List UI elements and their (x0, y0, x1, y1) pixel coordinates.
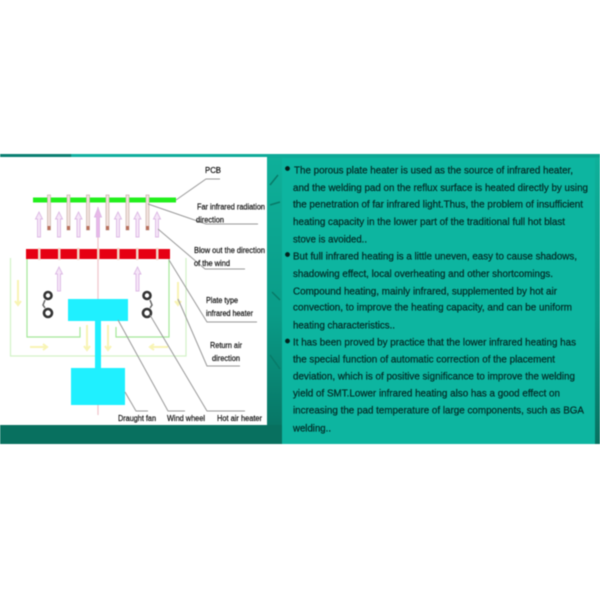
wind wheels (43, 292, 152, 317)
hot air heater and draught fan (68, 299, 128, 405)
diagram labels: Return air (210, 341, 242, 350)
diagram labels: Far infrared radiation (197, 202, 265, 212)
diagram labels: Draught fan (118, 414, 156, 423)
red infrared heater (26, 249, 170, 259)
rod tips (48, 226, 149, 230)
diagram labels: Blow out the direction (194, 246, 265, 255)
bullet 2 (285, 252, 577, 332)
center axis (97, 207, 99, 415)
yellow air arrows (15, 280, 181, 350)
bullet 1: The porous plate heater is used as the source of infrared heater, (294, 166, 573, 176)
diagram labels: direction (212, 354, 240, 363)
diagram labels (118, 166, 265, 423)
diagram labels: Wind wheel (167, 414, 205, 423)
bullet 3: welding.. (292, 424, 331, 434)
diagram labels: Plate type (206, 296, 238, 305)
teal background band (0, 154, 600, 444)
bullet 2: But full infrared heating is a little uneven, easy to cause shadows, (293, 252, 577, 262)
bullet 3: the special function of automatic correction of the placement (293, 354, 555, 366)
diagram labels: of the wind (194, 259, 230, 268)
PCB bar (33, 198, 176, 202)
panel: diagram (0, 157, 267, 425)
heater gaps (38, 248, 158, 260)
diagram labels: Hot air heater (217, 414, 262, 423)
bullet 3: yield of SMT.Lower infrared heating also has a good effect on (293, 388, 560, 400)
bullet 2: heating characteristics.. (293, 320, 395, 332)
bullet 3: deviation, which is of positive significance to improve the welding (293, 372, 575, 382)
bullet 1: heating capacity in the lower part of the traditional full hot blast (293, 217, 565, 228)
panel: explanation text (282, 158, 595, 444)
pink up arrows (36, 208, 160, 291)
bullet 3 (285, 338, 584, 434)
bullet 2: Compound heating, mainly infrared, supplemented by hot air (293, 286, 558, 298)
far infrared rods (48, 195, 149, 230)
bullet 3: increasing the pad temperature of large components, such as BGA (293, 406, 584, 416)
air duct outlines (10, 258, 186, 356)
leader lines (118, 179, 258, 411)
bullet 1: and the welding pad on the reflux surface is heated directly by using (293, 183, 588, 194)
bullet 1 (285, 166, 588, 246)
diagram labels: infrared heater (206, 309, 253, 318)
bullet 3: It has been proved by practice that the lower infrared heating has (293, 338, 576, 348)
bullet 2: convection, to improve the heating capacity, and can be uniform (293, 302, 572, 314)
bullet 1: stove is avoided.. (293, 234, 367, 246)
bullet 1: the penetration of far infrared light.Thus, the problem of insufficient (293, 200, 583, 210)
diagram labels: direction (196, 216, 224, 224)
bullet 2: shadowing effect, local overheating and other shortcomings. (293, 269, 553, 280)
diagram labels: PCB (205, 166, 221, 175)
